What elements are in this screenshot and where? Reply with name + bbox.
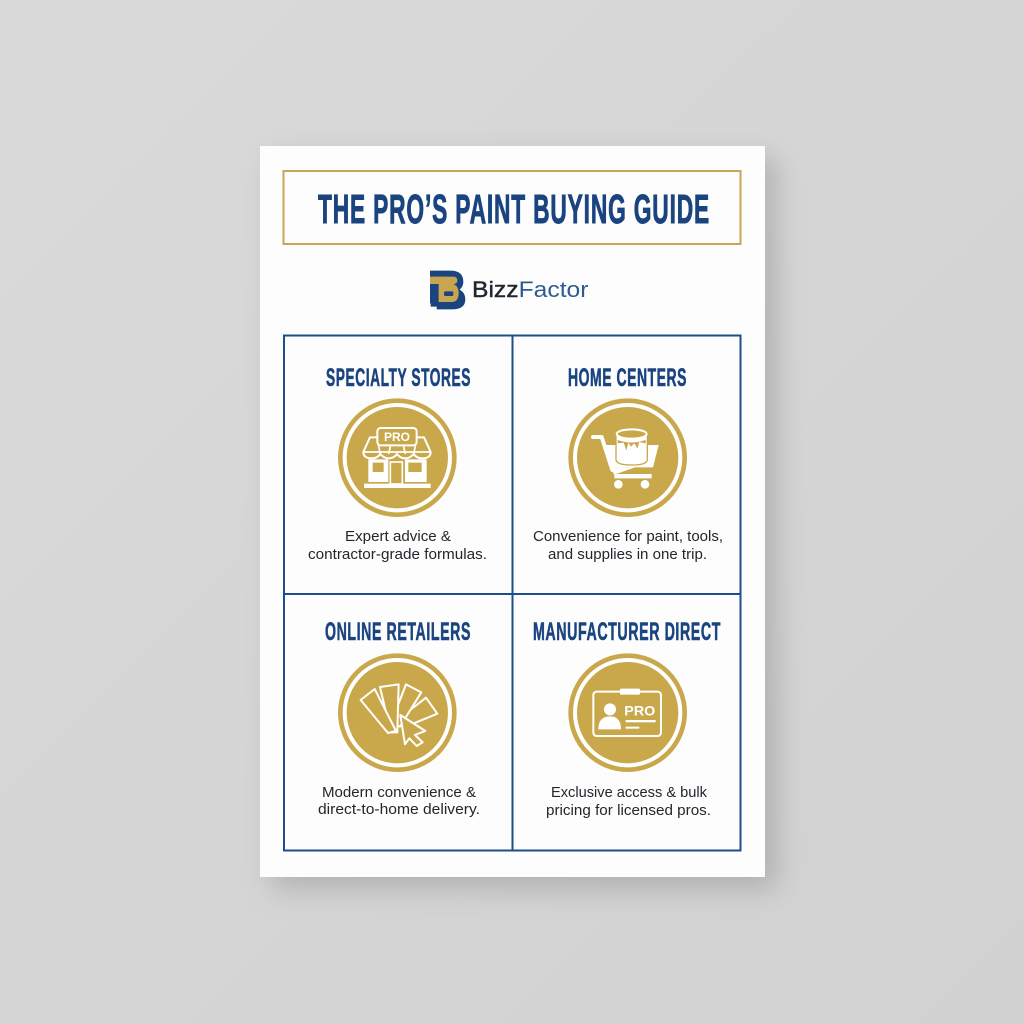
wordmark: BizzFactor (472, 277, 589, 302)
heading: MANUFACTURER DIRECT (533, 618, 721, 646)
panel: guide card (260, 146, 765, 877)
title box (284, 171, 740, 244)
icon: pro storefront: PRO (384, 430, 410, 444)
panel: manufacturer direct: pricing for licensed pros. (546, 802, 711, 819)
panel: manufacturer direct (533, 618, 721, 819)
panel: specialty stores: contractor-grade formulas. (308, 546, 487, 563)
comparison grid (284, 335, 741, 851)
description: Modern convenience & (322, 784, 476, 801)
description: Convenience for paint, tools, (533, 528, 723, 545)
panel: online retailers: direct-to-home delivery. (318, 801, 480, 818)
panel: home centers: and supplies in one trip. (548, 546, 707, 563)
logo: BizzFactor (430, 271, 589, 309)
description: Expert advice & (345, 528, 451, 545)
description: Exclusive access & bulk (551, 784, 707, 801)
heading: HOME CENTERS (568, 364, 687, 392)
panel: online retailers (318, 618, 480, 818)
panel: specialty stores (308, 364, 487, 563)
icon: color fan and cursor (338, 653, 457, 772)
icon: pro storefront (338, 398, 457, 517)
icon: pro ID badge: PRO (624, 704, 656, 719)
title: THE PRO’S PAINT BUYING GUIDE (318, 186, 710, 232)
icon: B monogram (430, 271, 465, 309)
heading: ONLINE RETAILERS (325, 618, 471, 646)
icon: pro ID badge (568, 653, 687, 772)
heading: SPECIALTY STORES (326, 364, 471, 392)
panel: home centers (533, 364, 723, 563)
icon: cart with paint can (568, 398, 687, 517)
